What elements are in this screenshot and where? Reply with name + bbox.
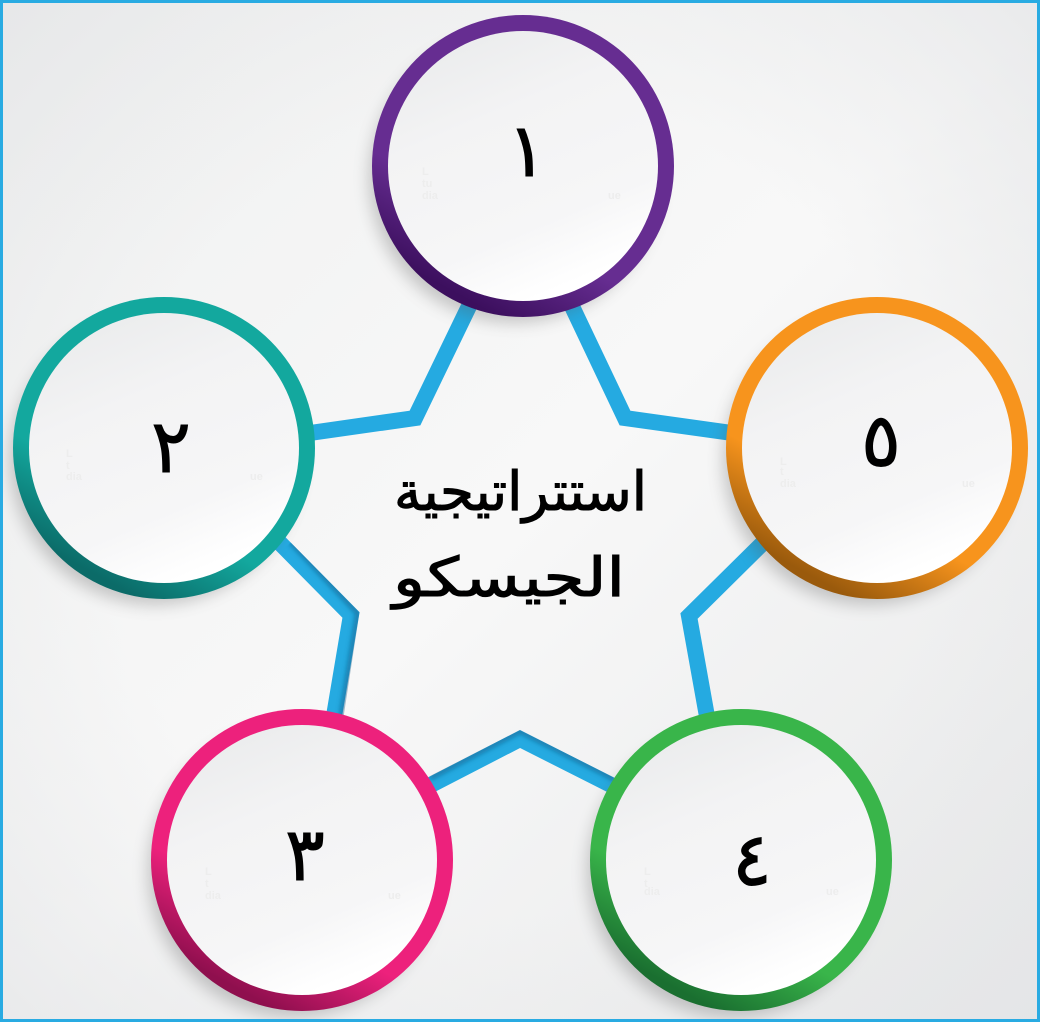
number 1: ١: [507, 108, 547, 194]
ghost text 3: ue: [388, 890, 401, 902]
ghost text 5: dia: [780, 478, 797, 490]
ghost text 4: ue: [826, 886, 839, 898]
ghost text 1: L: [422, 166, 429, 178]
ghost text 3: [205, 866, 401, 902]
ghost text 2: L: [66, 448, 73, 460]
number 2: ٢: [151, 404, 191, 490]
circle 3: [148, 709, 453, 1017]
ghost text 5: L: [780, 456, 787, 468]
ghost text 2: ue: [250, 471, 263, 483]
ghost text 2: dia: [66, 471, 83, 483]
circle 2: [10, 297, 315, 605]
ghost text 2: t: [66, 460, 70, 472]
ghost text 2: [66, 448, 263, 483]
ghost text 4: L: [644, 866, 651, 878]
ghost text 1: tu: [422, 178, 432, 190]
circle 4: [587, 709, 892, 1017]
ghost text 4: [644, 866, 839, 898]
number 3: ٣: [285, 812, 325, 898]
ghost text 4: t: [644, 878, 648, 890]
ghost text 1: [422, 166, 621, 202]
title: [389, 460, 647, 609]
circle 1: [369, 15, 674, 323]
ghost text 1: dia: [422, 190, 439, 202]
ghost text 5: t: [780, 466, 784, 478]
ghost text 3: L: [205, 866, 212, 878]
ghost text 3: dia: [205, 890, 222, 902]
ghost text 5: ue: [962, 478, 975, 490]
star connector lines: [275, 298, 768, 788]
ghost text 5: [780, 456, 975, 490]
number 5: ٥: [861, 398, 901, 484]
title: الجيسكو: [389, 546, 625, 609]
circle 5: [723, 297, 1028, 605]
title: استتراتيجية: [394, 460, 647, 523]
ghost text 1: ue: [608, 190, 621, 202]
number 4: ٤: [732, 817, 772, 903]
ghost text 4: dia: [644, 886, 661, 898]
ghost text 3: t: [205, 878, 209, 890]
